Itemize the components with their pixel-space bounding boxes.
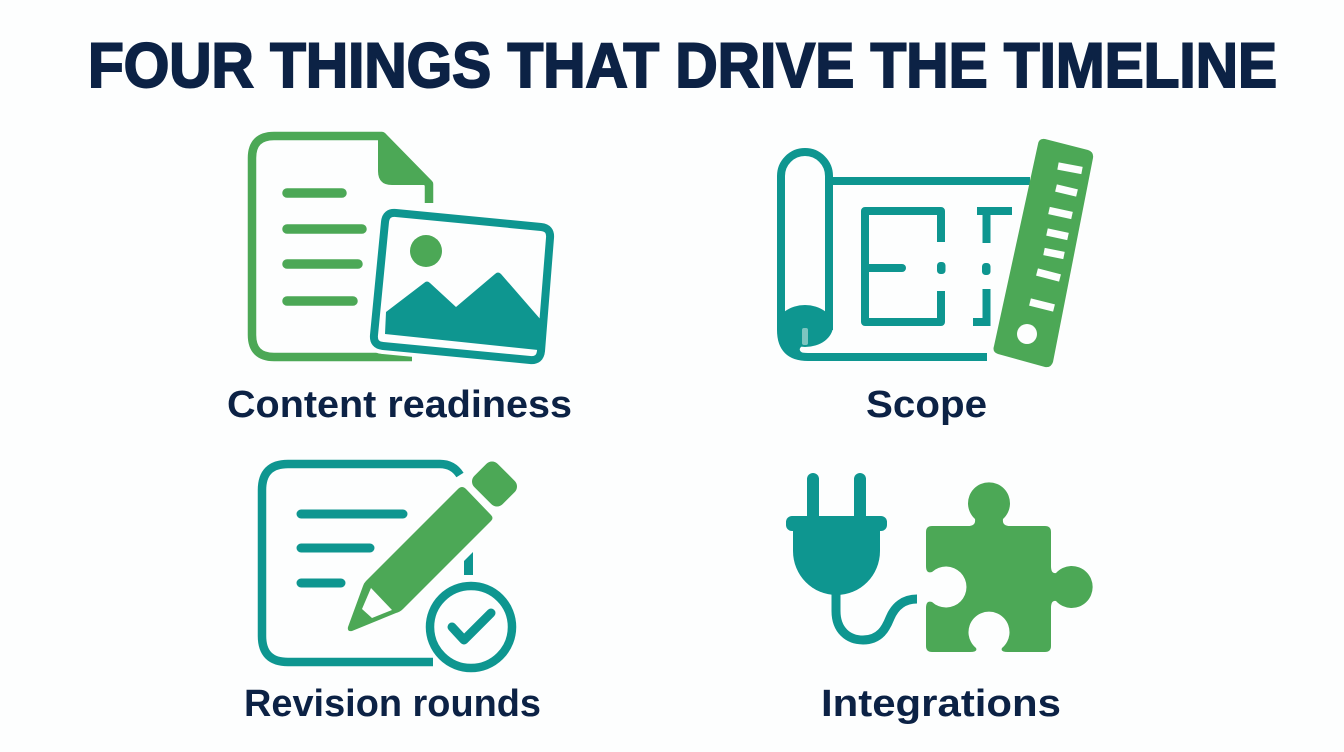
label: scope: Scope [866, 384, 987, 426]
panel: revision rounds [262, 458, 520, 674]
label: integrations: Integrations [821, 683, 1061, 725]
icon: puzzle piece [926, 482, 1093, 652]
icon: image frame [370, 209, 554, 364]
image mountains [385, 272, 544, 350]
title: FOUR THINGS THAT DRIVE THE TIMELINE [88, 31, 1277, 101]
icon: note frame [262, 464, 473, 662]
image sun [410, 235, 442, 267]
blueprint roll end [777, 305, 833, 347]
plug cord [836, 592, 917, 640]
frame fragment [464, 552, 473, 575]
ruler hole [1017, 324, 1037, 344]
panel: content readiness [252, 136, 554, 364]
icon: document [252, 136, 433, 357]
floor plan dots [937, 262, 946, 274]
icon: blueprint sheet [777, 152, 1030, 357]
label: content readiness: Content readiness [227, 384, 572, 426]
note lines [301, 514, 403, 583]
label: revision rounds: Revision rounds [244, 683, 541, 725]
panel: integrations [786, 473, 1093, 652]
panel: scope [777, 139, 1093, 367]
floor plan walls [865, 211, 1012, 322]
document fold [378, 137, 433, 185]
document text lines [287, 193, 362, 301]
icon: pencil [348, 458, 520, 631]
icon: ruler [994, 139, 1093, 367]
icon: plug [786, 473, 917, 640]
icon: check badge [424, 580, 518, 674]
